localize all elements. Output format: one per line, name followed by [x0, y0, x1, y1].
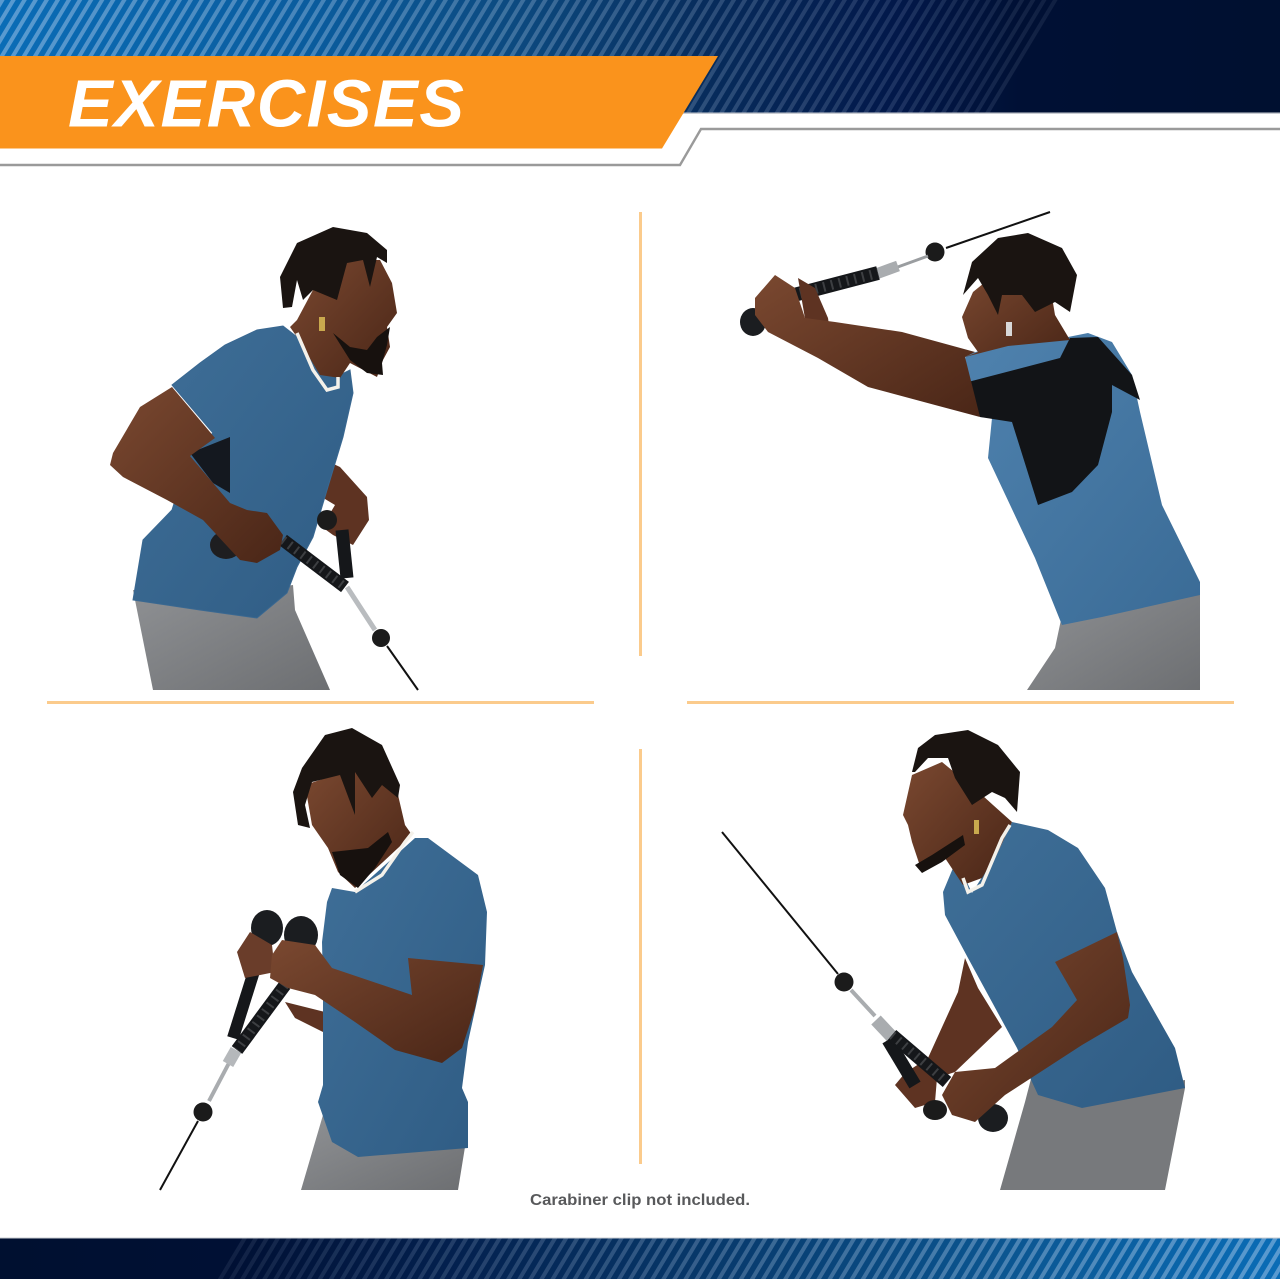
trousers — [1027, 585, 1200, 690]
shirt black panel — [968, 337, 1140, 505]
beard — [915, 835, 965, 873]
near arm and hand — [942, 932, 1130, 1122]
second hand — [798, 278, 830, 332]
necklace — [355, 832, 413, 892]
cable and rope handle — [722, 832, 1008, 1132]
divider: left horizontal — [47, 701, 594, 704]
necklace — [963, 825, 1010, 892]
far arm and hand — [895, 958, 1002, 1108]
divider: top vertical — [639, 212, 642, 656]
t-shirt — [318, 838, 487, 1157]
head and neck — [903, 762, 1012, 885]
head and neck — [305, 768, 412, 888]
beard — [333, 327, 390, 375]
far arm — [285, 1002, 325, 1033]
head and neck — [962, 270, 1070, 357]
cable and carabiner — [347, 587, 418, 690]
left hand — [237, 932, 275, 978]
caption: Carabiner clip not included. — [530, 1192, 750, 1209]
divider: bottom vertical — [639, 749, 642, 1164]
hair — [280, 227, 387, 308]
hair — [293, 728, 400, 828]
necklace — [297, 333, 338, 390]
trousers — [133, 585, 330, 690]
arm and right hand — [270, 940, 483, 1063]
cable and rope handle — [160, 910, 318, 1190]
title: EXERCISES — [68, 66, 464, 142]
earring — [319, 317, 325, 331]
title ribbon — [0, 56, 718, 148]
t-shirt — [133, 326, 353, 618]
trousers — [1000, 1075, 1185, 1190]
header underline stroke — [0, 129, 1280, 165]
earring — [1006, 322, 1012, 336]
beard — [332, 832, 392, 888]
near arm and hand — [110, 387, 283, 563]
footer banner — [0, 1238, 1280, 1279]
header banner — [0, 0, 1280, 114]
rope handle — [210, 510, 347, 587]
cable and rope handle — [740, 212, 1050, 336]
arms and hand — [755, 275, 980, 417]
hair — [963, 233, 1077, 315]
earring — [974, 820, 979, 834]
photo: exercise 4, forward rope press — [722, 730, 1185, 1190]
divider: right horizontal — [687, 701, 1234, 704]
photo: exercise 2, rope pull overhead — [740, 212, 1200, 690]
far arm and hand — [315, 460, 369, 545]
trousers — [301, 1115, 465, 1190]
shirt side panel — [190, 437, 230, 493]
head and neck — [290, 260, 397, 378]
photo: exercise 1, rope pull at the waist — [110, 227, 418, 690]
photo: exercise 3, rope curl — [160, 728, 487, 1190]
hair — [912, 730, 1020, 812]
t-shirt — [965, 333, 1200, 625]
t-shirt — [943, 822, 1185, 1108]
